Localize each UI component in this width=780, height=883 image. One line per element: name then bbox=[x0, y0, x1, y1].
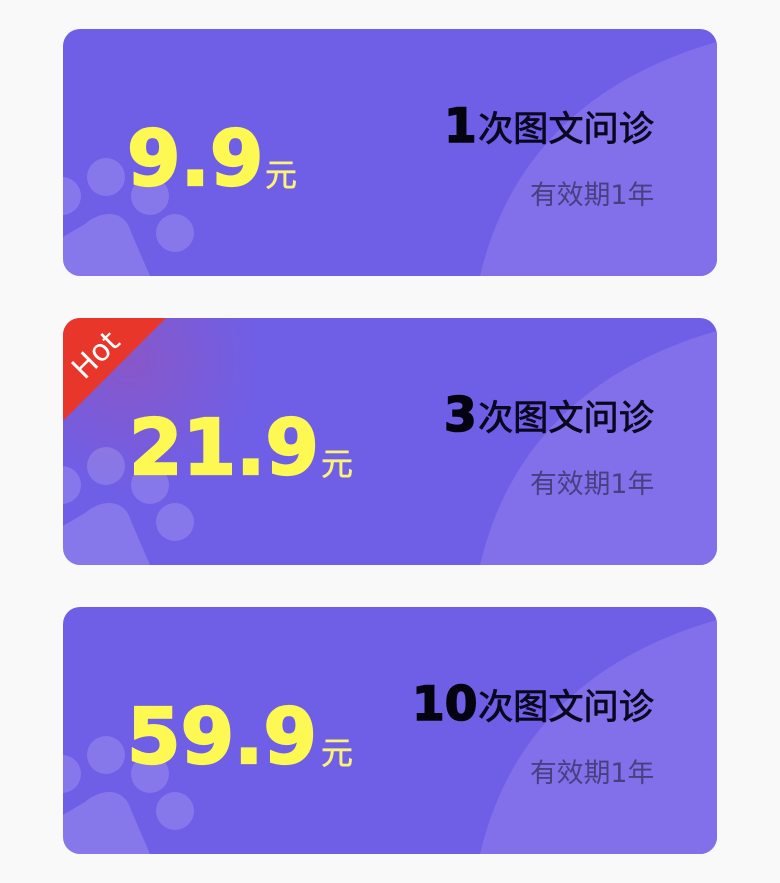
icon: paw print bbox=[63, 447, 194, 565]
consultation count: 10 bbox=[412, 677, 477, 732]
validity: 有效期1年 bbox=[530, 180, 654, 211]
icon: paw print bbox=[63, 736, 194, 854]
consultation title: 次图文问诊 bbox=[478, 688, 654, 727]
icon: paw print bbox=[63, 158, 194, 276]
card background bbox=[63, 29, 717, 276]
card background bbox=[63, 318, 717, 565]
card background bbox=[63, 607, 717, 854]
decorative arc bbox=[480, 330, 720, 565]
decorative arc bbox=[480, 619, 720, 854]
panel: 21.9 yuan plan bbox=[43, 318, 720, 565]
decorative glow bbox=[63, 318, 224, 454]
price: 59.9 bbox=[127, 693, 317, 782]
consultation count: 3 bbox=[444, 388, 477, 443]
price: 21.9 bbox=[129, 404, 319, 493]
hot ribbon bbox=[63, 318, 166, 421]
consultation count: 1 bbox=[444, 99, 477, 154]
decorative arc bbox=[480, 41, 720, 276]
price unit: 元 bbox=[321, 735, 353, 771]
validity: 有效期1年 bbox=[530, 758, 654, 789]
consultation title: 次图文问诊 bbox=[478, 110, 654, 149]
panel: 59.9 yuan plan bbox=[43, 607, 720, 854]
price unit: 元 bbox=[321, 446, 353, 482]
hot label: Hot bbox=[65, 324, 127, 386]
consultation title: 次图文问诊 bbox=[478, 399, 654, 438]
price unit: 元 bbox=[265, 157, 297, 193]
price: 9.9 bbox=[127, 115, 263, 204]
panel: 9.9 yuan plan bbox=[43, 29, 720, 276]
validity: 有效期1年 bbox=[530, 469, 654, 500]
